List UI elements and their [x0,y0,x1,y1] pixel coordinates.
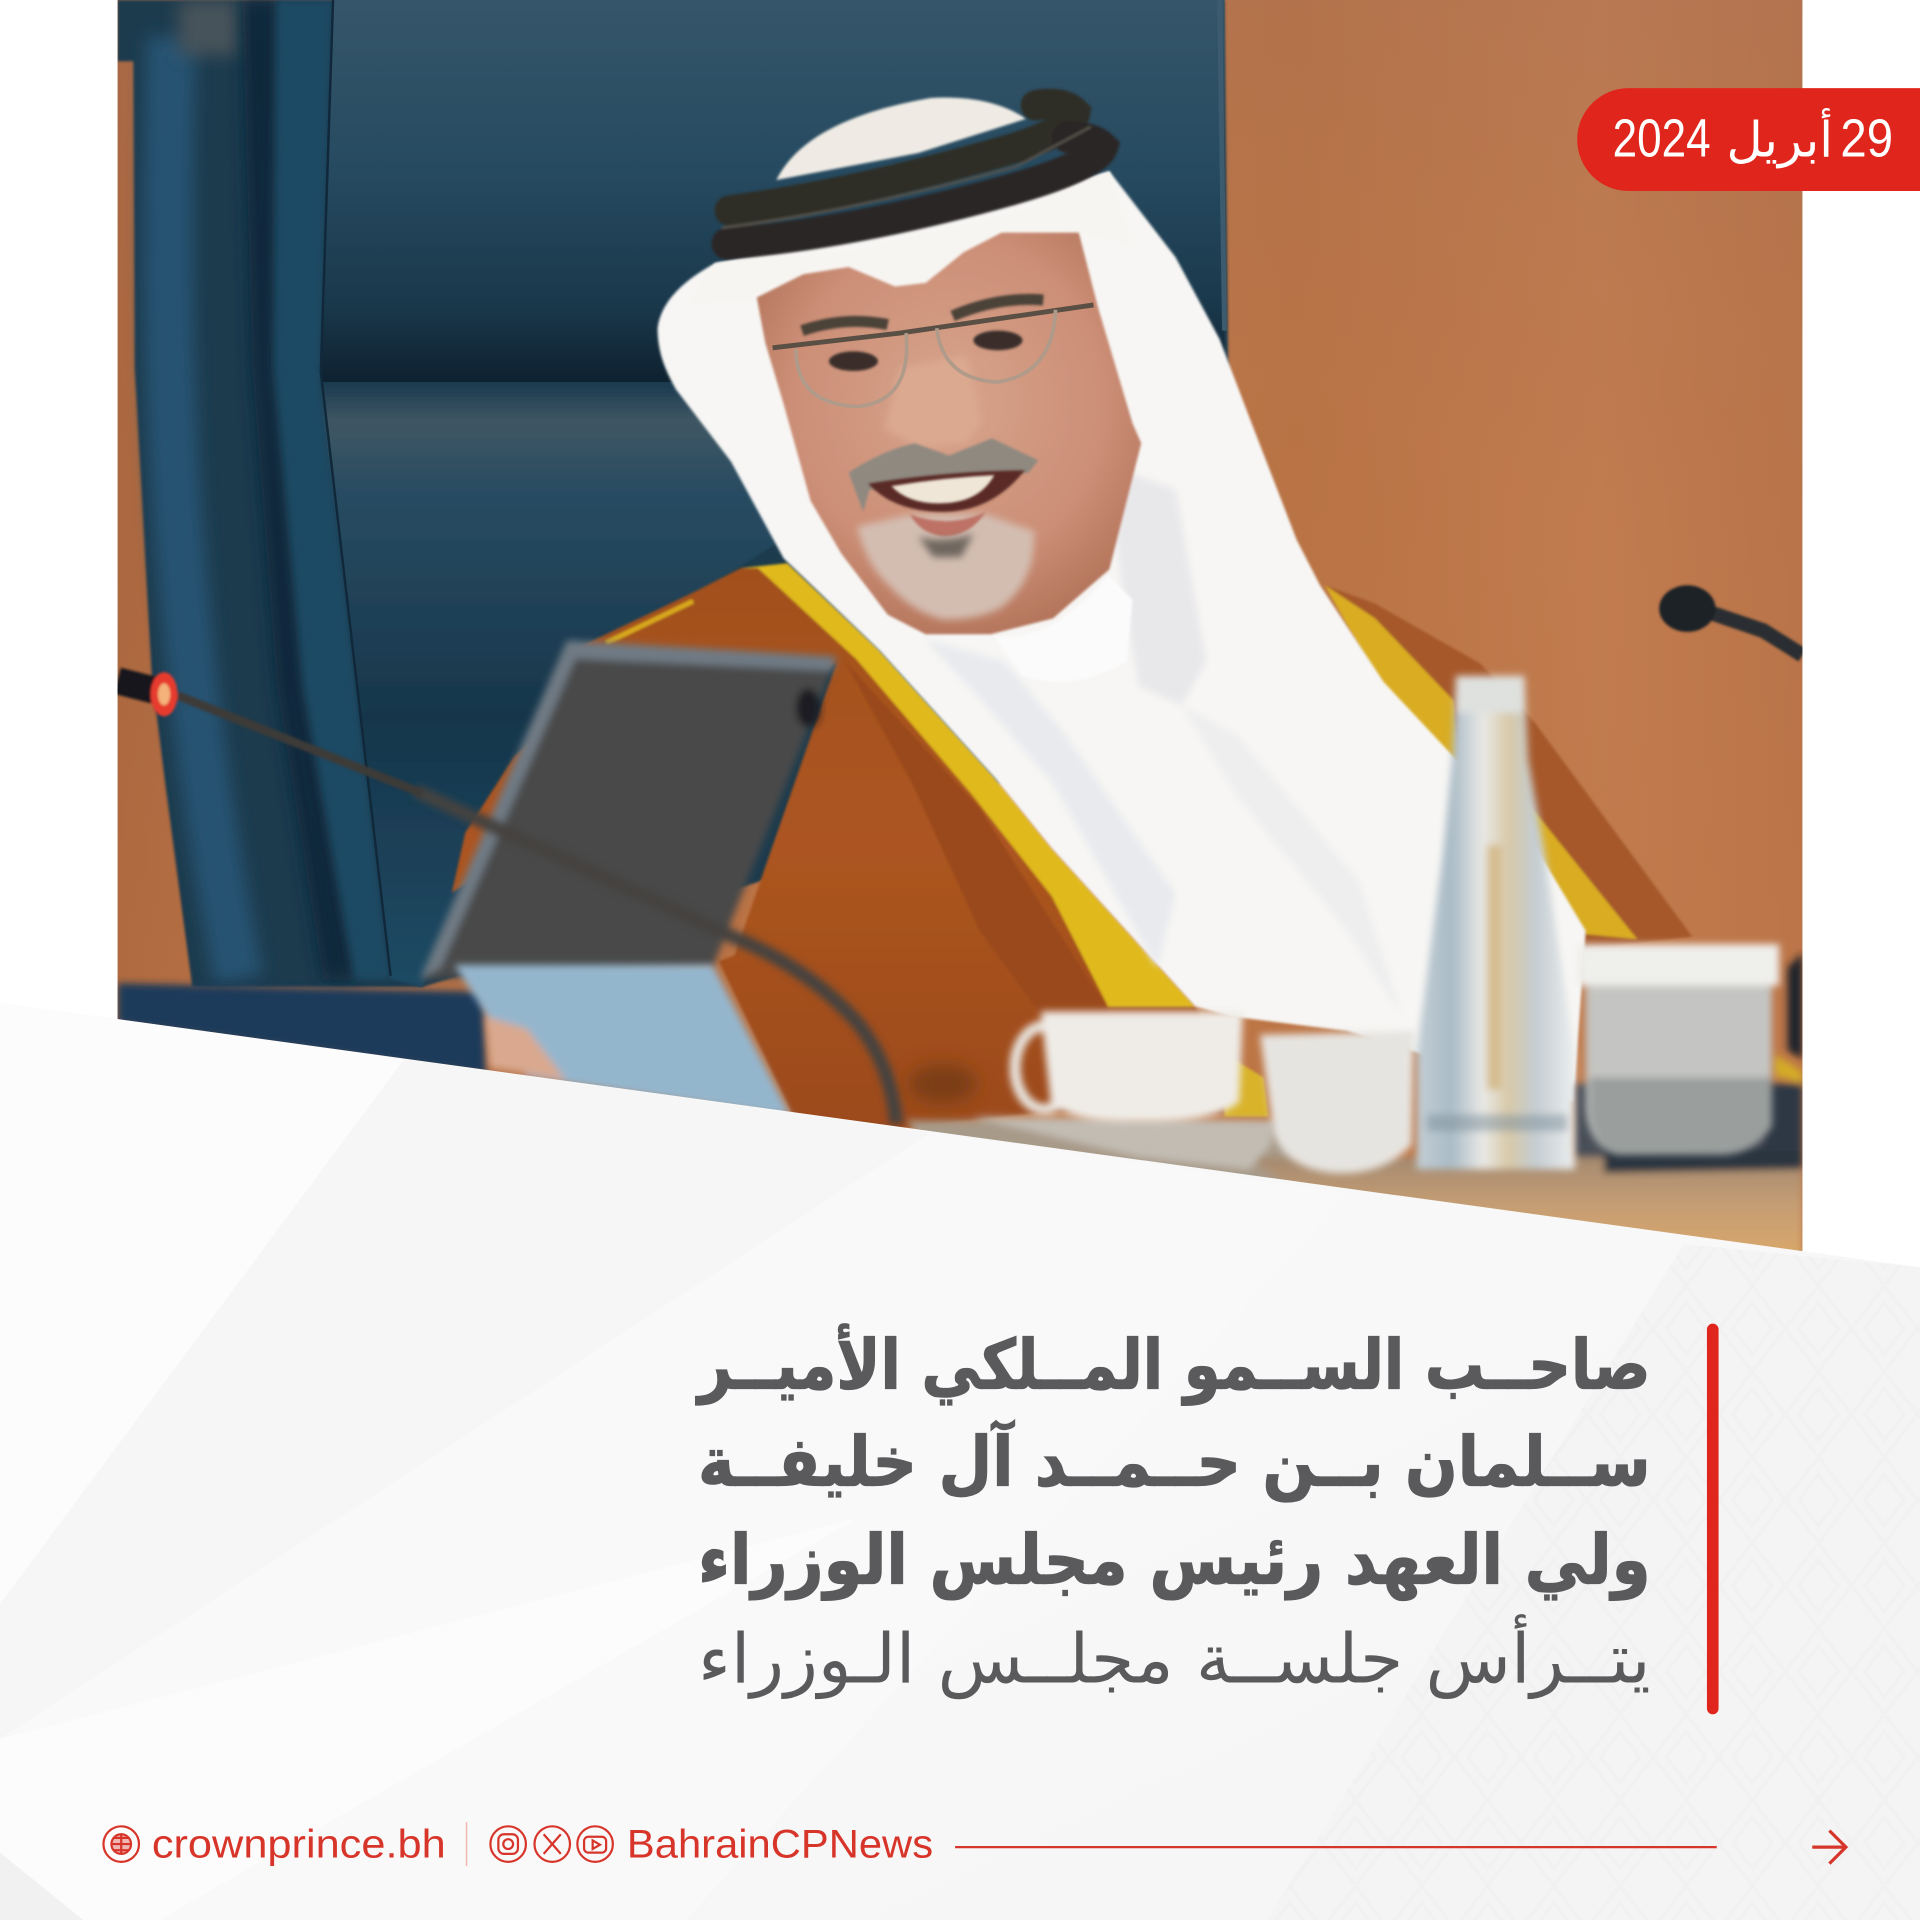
moustache [849,438,1038,512]
left desk folder [118,983,486,1075]
coffee cup 1 [1015,1011,1243,1122]
nose [887,360,976,445]
coffee cup 2 [1260,1031,1414,1173]
water bottle [1417,676,1575,1169]
website text: crownprince.bh [152,1823,446,1867]
gold trim right [1325,585,1460,771]
beard [857,514,1035,620]
date text: 2024 [1613,109,1711,169]
robe left [452,563,1269,1129]
chair [118,0,1237,987]
face [757,233,1141,634]
footer [103,1822,1846,1867]
dome of ghutra [776,98,1026,180]
wood wall [118,0,1802,1261]
table [906,953,1802,1261]
angled white panel [0,1003,1920,1920]
soul patch [918,534,973,557]
heading text block [695,1324,1651,1699]
red accent bar [1707,1324,1719,1714]
subheading line: يتــرأس جلســة مجلــس الـوزراء [698,1613,1651,1699]
glasses [773,305,1093,407]
date badge [1577,88,1920,191]
eyebrows [802,321,888,331]
divider [466,1822,468,1866]
date text [1613,108,1893,169]
icon: x [534,1826,570,1862]
gold trim left [741,563,1195,1007]
icon: youtube [577,1826,613,1862]
robe right [1325,585,1692,949]
microphone left [416,791,896,1124]
icon: instagram [490,1826,526,1862]
heading line 3: ولي العهد رئيس مجلس الوزراء [698,1520,1651,1600]
heading line 1: صاحــب الســمو المــلكي الأميــر [695,1324,1651,1406]
mouth [868,470,1025,512]
icon: globe [103,1826,139,1862]
water glass [1577,944,1779,1155]
background facets [0,1003,1920,1920]
paper and hand [454,965,791,1117]
social handle text: BahrainCPNews [627,1823,933,1867]
photo: crown prince at cabinet session [118,0,1802,1261]
microphone left near segment [118,672,422,793]
heading line 2: ســلمان بــن حــمــد آل خليفــة [698,1419,1651,1502]
date text: أبريل [1727,108,1833,169]
tablet [420,640,836,980]
footer rule [955,1846,1717,1848]
agal [722,104,1102,244]
date text: 29 [1840,109,1893,169]
microphone right [1659,585,1802,655]
ghutra front fold [712,170,1112,266]
white thobe and scarf [658,171,1586,1102]
arrow [1812,1831,1846,1864]
eyes [829,351,878,371]
